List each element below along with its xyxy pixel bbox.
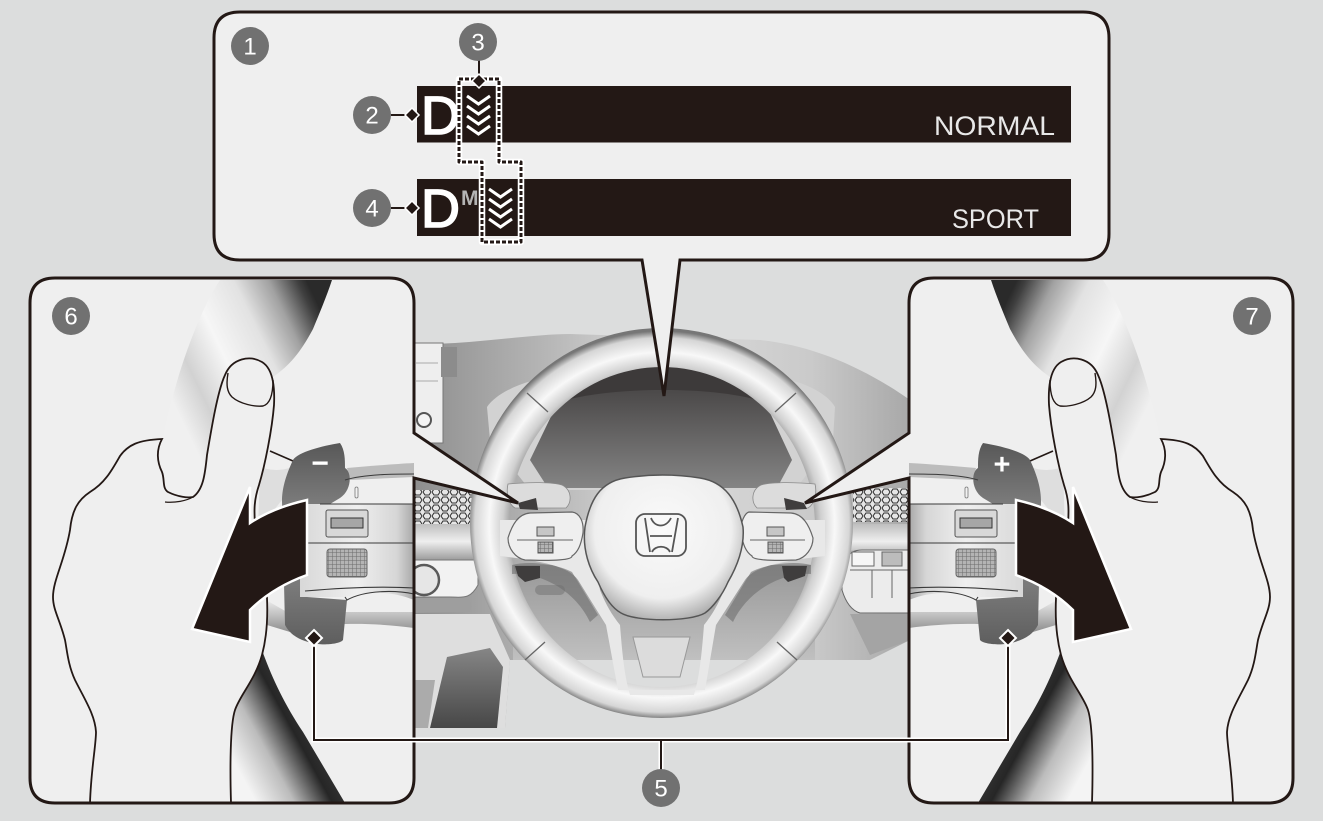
Honda emblem xyxy=(636,514,686,556)
steering wheel buttons right xyxy=(741,512,813,560)
leader: 4 xyxy=(391,201,419,215)
switch button lower xyxy=(956,549,996,577)
panel: left paddle close-up xyxy=(30,278,518,803)
minus mark: − xyxy=(311,447,329,480)
steering rim upper xyxy=(991,280,1148,450)
badge 7: 7 xyxy=(1245,304,1259,330)
instrument cluster screen xyxy=(530,390,792,488)
thumbnail xyxy=(227,373,273,406)
leader: 3 xyxy=(472,60,486,88)
gear letter D: D xyxy=(421,86,460,146)
leader: paddles to 5 xyxy=(306,630,1016,775)
badge 1 xyxy=(231,27,269,65)
badge 1: 1 xyxy=(243,34,257,60)
panel outline xyxy=(805,278,1293,803)
steering wheel spokes xyxy=(500,520,825,695)
badge 3 xyxy=(459,23,497,61)
switch body xyxy=(300,504,414,600)
dashboard scene xyxy=(409,328,910,728)
steering wheel buttons left xyxy=(508,512,583,560)
center display xyxy=(414,343,457,443)
paddle: plus xyxy=(973,443,1041,644)
badge 5: 5 xyxy=(654,776,668,802)
switch column xyxy=(347,463,414,480)
badge 6: 6 xyxy=(64,304,78,330)
switch button upper xyxy=(326,510,368,537)
arrow: shift up xyxy=(1016,487,1131,642)
switch column xyxy=(909,463,976,480)
badge 6 xyxy=(52,297,90,335)
lower spoke cover xyxy=(633,637,690,677)
steering rim upper xyxy=(176,280,332,450)
mode label normal: NORMAL xyxy=(934,111,1055,141)
panel: gear display callout xyxy=(214,12,1109,396)
paddle: minus xyxy=(282,443,350,644)
badge 4 xyxy=(353,189,391,227)
switch button upper xyxy=(955,510,997,537)
badge 2: 2 xyxy=(365,102,379,130)
steering rim lower xyxy=(978,653,1093,803)
steering rim lower xyxy=(230,653,345,803)
badge 3: 3 xyxy=(471,30,485,56)
panel outline xyxy=(30,278,518,803)
dashed highlight xyxy=(459,79,521,242)
steering wheel ring xyxy=(470,328,853,718)
stalks xyxy=(507,483,816,508)
thumbnail xyxy=(1050,373,1096,406)
display bar: sport: M xyxy=(461,187,478,210)
cluster hood xyxy=(560,366,763,420)
switch button lower xyxy=(327,549,367,577)
hand xyxy=(1049,358,1270,803)
leader: 2 xyxy=(391,108,419,122)
badge 7 xyxy=(1233,297,1271,335)
rim behind paddle xyxy=(258,468,290,516)
plus mark: + xyxy=(994,449,1010,481)
air vents xyxy=(414,488,910,560)
center console controls xyxy=(409,550,910,655)
mode label sport: SPORT xyxy=(952,204,1039,234)
gear letter D with M: D xyxy=(421,179,460,239)
airbag hub xyxy=(584,475,743,620)
badge 2 xyxy=(353,96,391,134)
display bar: normal xyxy=(417,86,1071,146)
lower dash and footwell xyxy=(414,565,815,728)
panel: right paddle close-up xyxy=(805,278,1293,803)
display bar: sport xyxy=(417,179,1071,239)
hand xyxy=(53,358,274,803)
arrow: shift down xyxy=(192,487,307,642)
gear chevrons sport xyxy=(489,189,512,227)
switch body xyxy=(909,504,1023,600)
badge 4: 4 xyxy=(365,196,379,222)
rim behind paddle xyxy=(1034,468,1064,516)
badge 5 xyxy=(642,769,680,807)
gear chevrons normal xyxy=(467,96,490,134)
small paddles xyxy=(515,498,807,582)
